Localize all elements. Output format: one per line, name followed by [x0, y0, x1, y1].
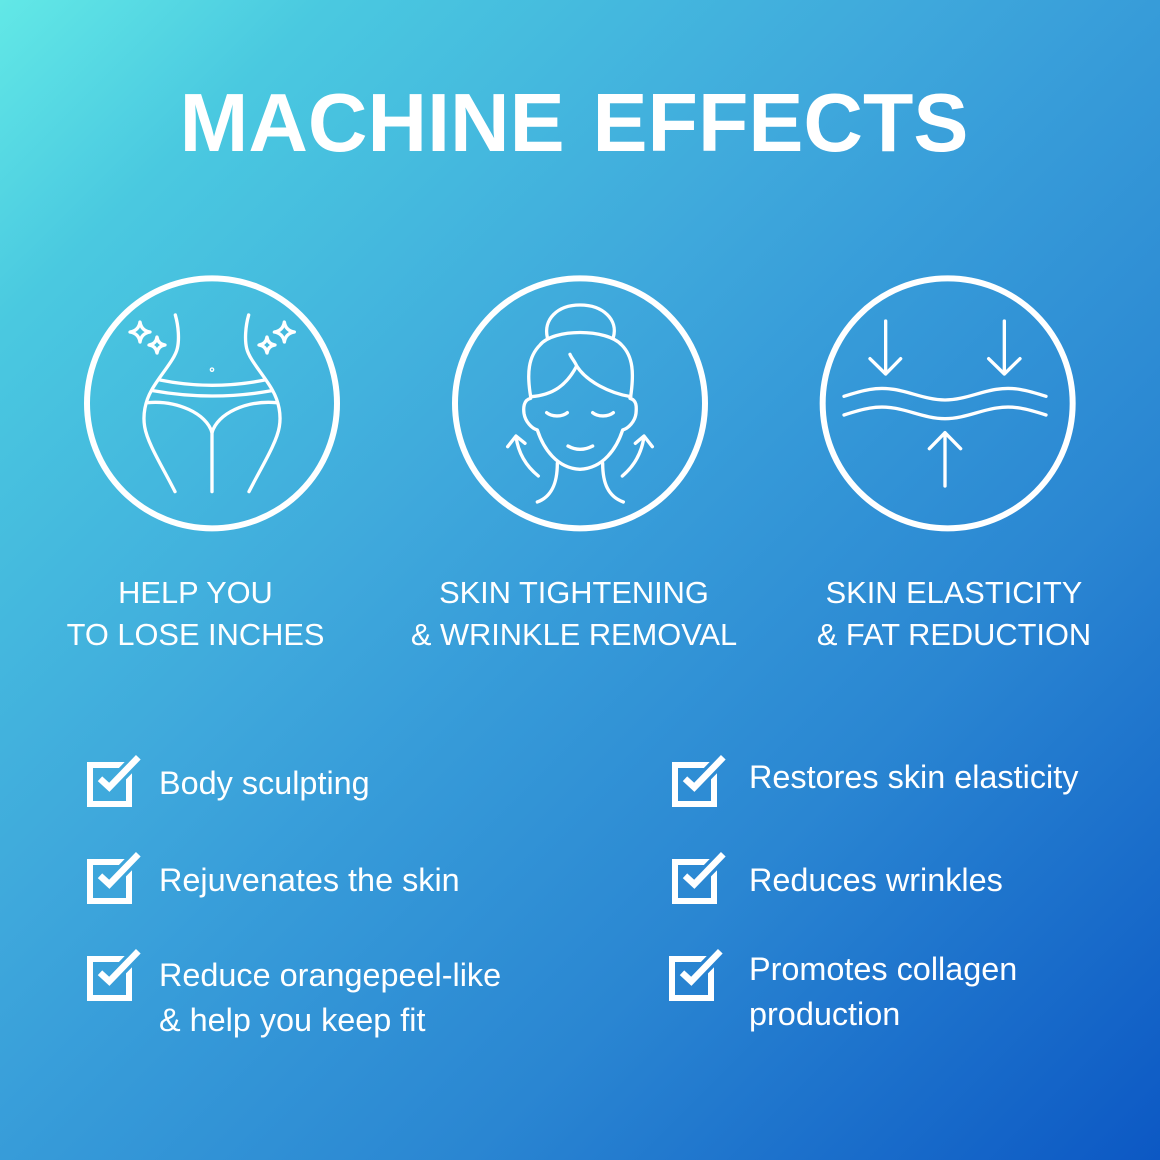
item: collagen: production	[749, 996, 900, 1032]
icon: check 2	[87, 854, 138, 904]
item: restores: Restores skin elasticity	[749, 759, 1079, 795]
label: skin tightening: SKIN TIGHTENING	[439, 575, 709, 610]
label: skin tightening	[411, 575, 737, 652]
icon: check 6	[669, 951, 720, 1001]
icon: compressed skin layers	[823, 278, 1073, 528]
item: orangepeel	[159, 957, 501, 1038]
label: lose inches	[67, 575, 324, 652]
label: skin elasticity: & FAT REDUCTION	[817, 617, 1091, 652]
item: rejuvenates: Rejuvenates the skin	[159, 862, 460, 898]
label: lose inches: TO LOSE INCHES	[67, 617, 324, 652]
icon: check 5	[672, 854, 723, 904]
label: skin tightening: & WRINKLE REMOVAL	[411, 617, 737, 652]
item: orangepeel: & help you keep fit	[159, 1002, 426, 1038]
item: collagen: Promotes collagen	[749, 951, 1017, 987]
item: body sculpting: Body sculpting	[159, 765, 370, 801]
icon: waist	[87, 278, 337, 528]
label: skin elasticity	[817, 575, 1091, 652]
label: skin elasticity: SKIN ELASTICITY	[826, 575, 1082, 610]
item: orangepeel: Reduce orangepeel-like	[159, 957, 501, 993]
item: collagen	[749, 951, 1017, 1032]
icon: check 3	[87, 951, 138, 1001]
title: MACHINE EFFECTS	[180, 77, 968, 169]
icon: face	[455, 278, 705, 528]
icon: check 1	[87, 757, 138, 807]
item: reduces wrinkles: Reduces wrinkles	[749, 862, 1003, 898]
label: lose inches: HELP YOU	[118, 575, 273, 610]
icon: check 4	[672, 757, 723, 807]
